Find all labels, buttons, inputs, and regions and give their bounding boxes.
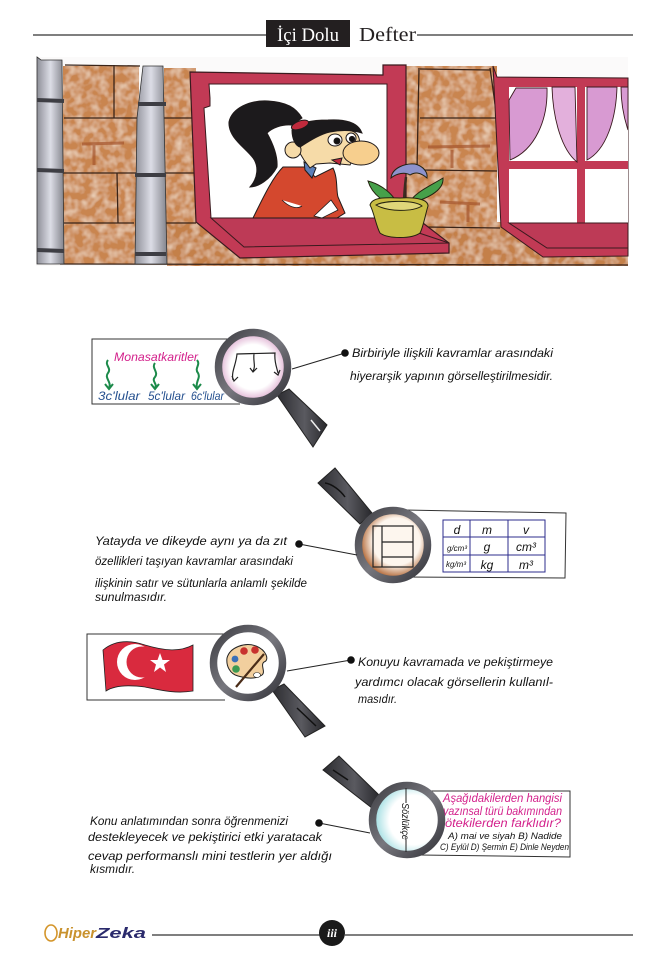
question example box: Aşağıdakilerden hangisi (442, 793, 562, 805)
question example box (420, 791, 570, 857)
description 3 (354, 657, 553, 706)
question example box: C) Eylül D) Şermin E) Dinle Neyden (440, 842, 569, 852)
magnifier 1 (218, 332, 327, 447)
logo: HiperZeka: Zeka (95, 925, 146, 942)
magnifier 4 (323, 756, 442, 854)
girl (229, 101, 379, 218)
description 4: Konu anlatımından sonra öğrenmenizi (90, 816, 288, 828)
magnifier 4: Sözlükçe (399, 803, 410, 840)
table example box: v (523, 523, 530, 537)
description 4: cevap performanslı mini testlerin yer aldığı (88, 851, 332, 863)
table example box: g (484, 540, 491, 554)
description 3: masıdır. (358, 694, 397, 706)
main window frame (190, 65, 449, 258)
question example box: ötekilerden farklıdır? (445, 818, 562, 830)
table example box: m³ (519, 558, 534, 572)
table example box: cm³ (516, 540, 537, 554)
description 4: kısmıdır. (90, 864, 135, 876)
description 1: Birbiriyle ilişkili kavramlar arasındaki (352, 348, 553, 360)
icon: paint palette (227, 645, 267, 687)
description 2: Yatayda ve dikeyde aynı ya da zıt (95, 536, 288, 548)
panel 2: table (95, 468, 566, 604)
page number: iii (327, 926, 338, 940)
table example box (405, 510, 566, 578)
header: İçi Dolu Defter (33, 20, 633, 47)
drainpipes (37, 57, 167, 264)
flag example box (87, 634, 225, 700)
flower pot (368, 164, 443, 238)
page number (319, 920, 345, 946)
pointer 4 (315, 819, 370, 833)
icon: Turkish flag (103, 642, 193, 692)
illustration: girl at the window (36, 57, 628, 266)
description 2 (95, 536, 307, 604)
question example box: A) mai ve siyah B) Nadide (447, 831, 562, 842)
panel 3: visuals (87, 628, 553, 737)
table example box: kg (481, 558, 494, 572)
concept map example box: 3c'lular (98, 391, 141, 403)
description 1 (350, 348, 553, 383)
concept map example box (92, 339, 240, 404)
pointer 3 (287, 656, 355, 671)
header: İçi Dolu Defter: Defter (359, 24, 416, 46)
table example box: kg/m³ (446, 560, 466, 569)
right window with curtains (493, 66, 628, 257)
table example box: g/cm³ (447, 544, 467, 553)
table example box: d (454, 523, 461, 537)
concept map example box: Monasatkaritler (114, 350, 199, 364)
logo: HiperZeka (45, 925, 146, 942)
description 4 (88, 816, 332, 876)
description 2: sunulmasıdır. (95, 592, 167, 604)
table example box: m (482, 523, 492, 537)
pointer 1 (292, 349, 349, 369)
description 4: destekleyecek ve pekiştirici etki yaratacak (88, 832, 323, 844)
footer (45, 920, 633, 946)
question example box: yazınsal türü bakımından (442, 806, 562, 818)
magnifier 2 (318, 468, 428, 580)
brick wall (60, 65, 628, 266)
description 3: Konuyu kavramada ve pekiştirmeye (358, 657, 553, 669)
concept map example box: 5c'lular (148, 391, 186, 403)
description 2: ilişkinin satır ve sütunlarla anlamlı şekilde (95, 578, 307, 590)
description 2: özellikleri taşıyan kavramlar arasındaki (95, 556, 293, 568)
magnifier 3 (214, 628, 325, 737)
panel 4: questions (88, 756, 570, 876)
description 1: hiyerarşik yapının görselleştirilmesidir. (350, 371, 553, 383)
logo: HiperZeka: Hiper (58, 925, 97, 942)
description 3: yardımcı olacak görsellerin kullanıl- (354, 677, 553, 689)
pointer 2 (295, 540, 357, 555)
concept map example box: 6c'lular (191, 391, 225, 403)
panel 1: concept map (92, 332, 553, 447)
header: İçi Dolu Defter: İçi Dolu (277, 25, 339, 46)
